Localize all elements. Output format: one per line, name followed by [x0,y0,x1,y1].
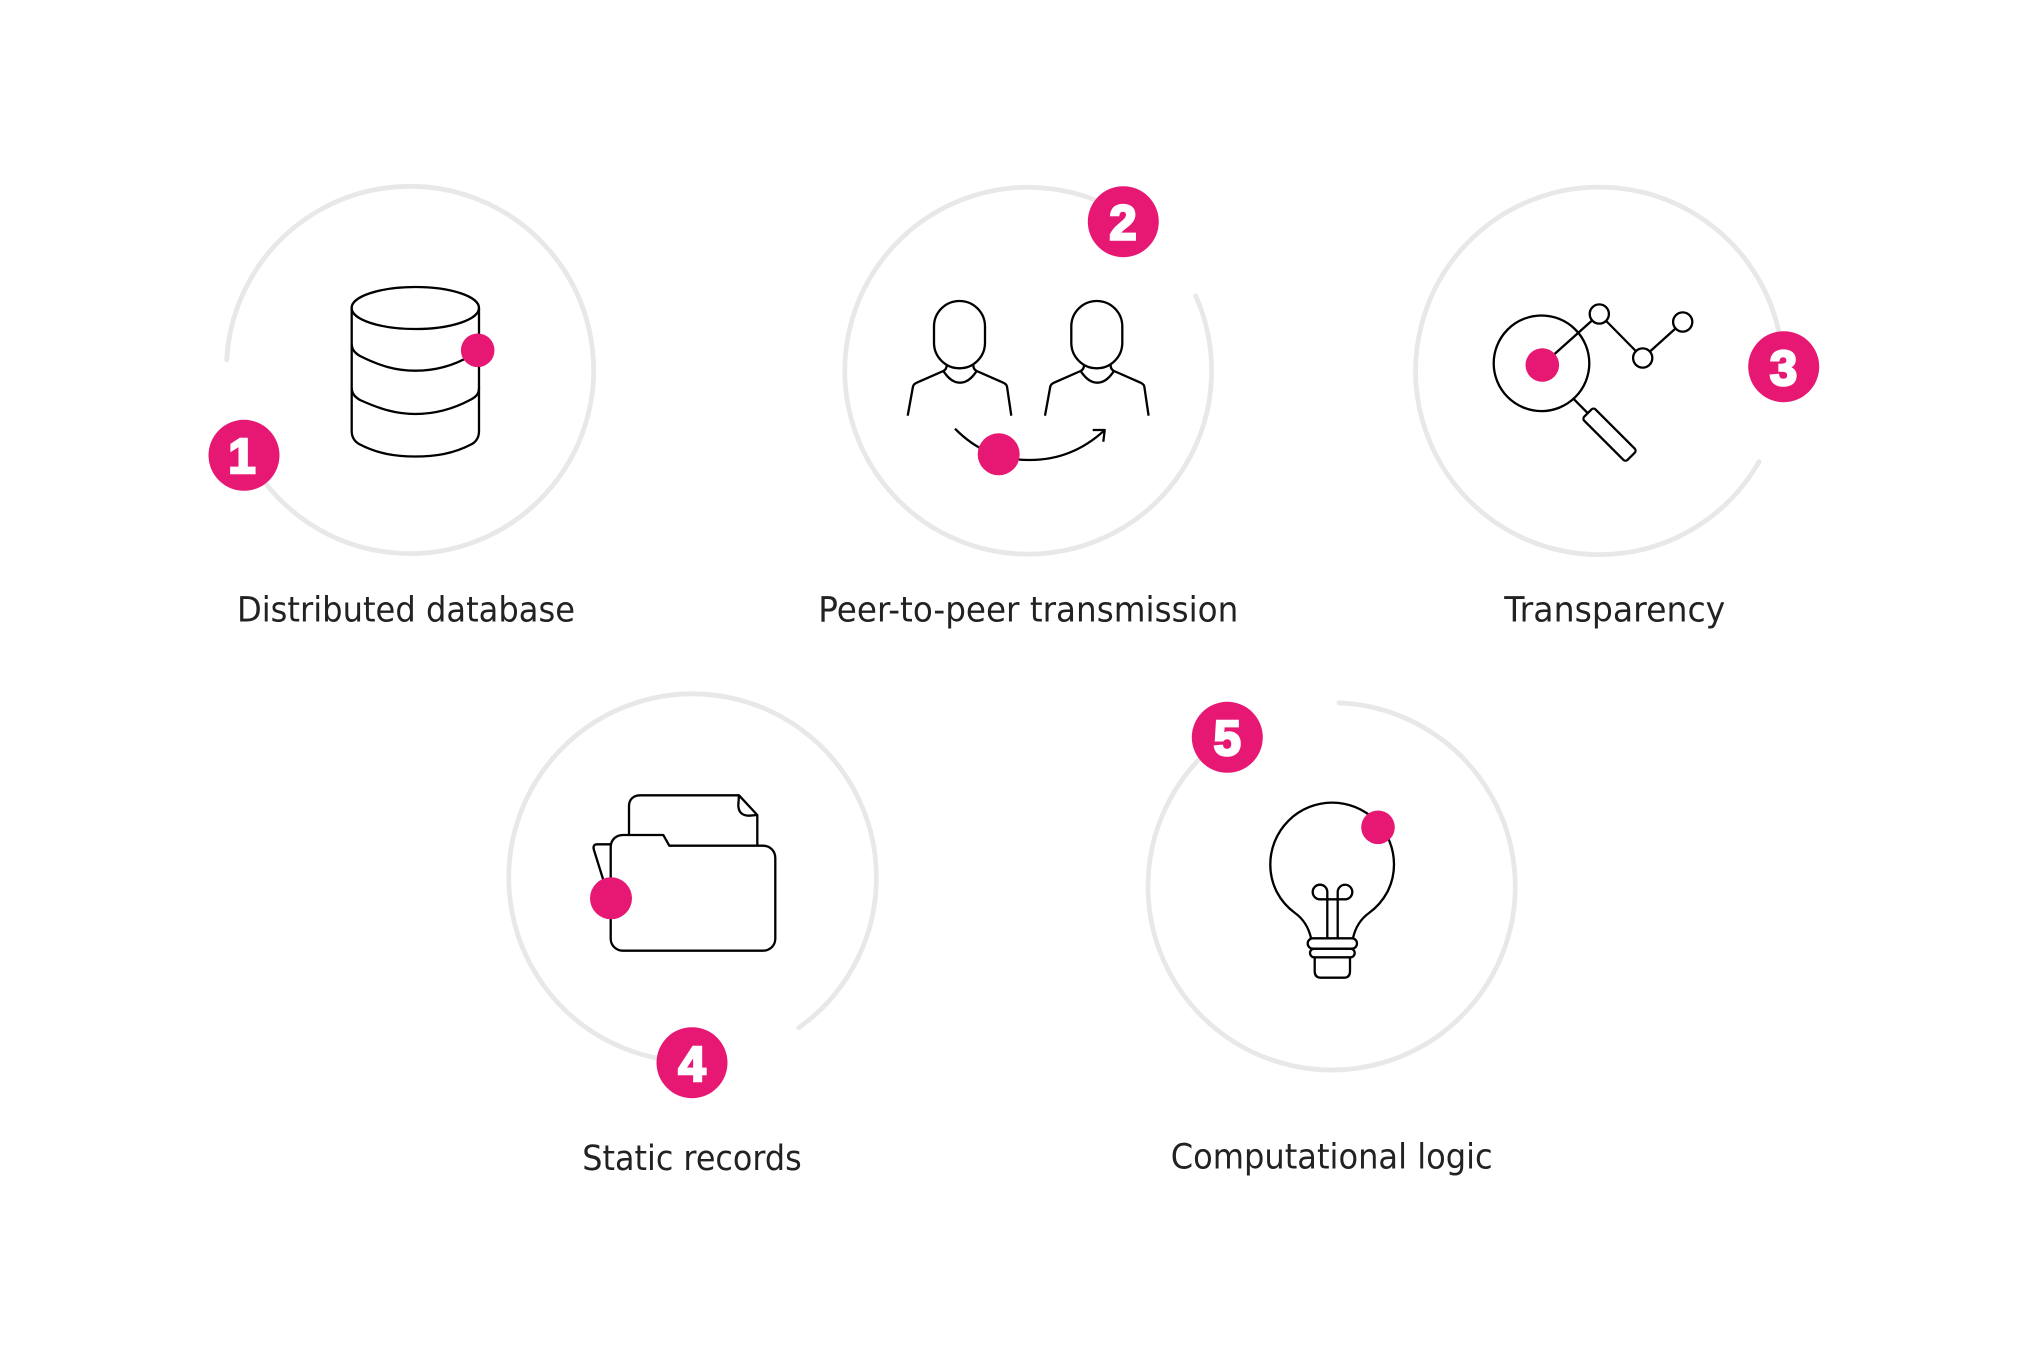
pink marker dot 4 [590,877,632,919]
progress ring 2 [845,187,1212,554]
number badge 5: 5 [1214,712,1241,766]
number badge 5 [1192,702,1263,773]
icon: person right [1045,301,1149,416]
panel: computational logic [1148,702,1515,1177]
panel: transparency [1416,187,1819,631]
label: Distributed database: Distributed database [237,591,575,631]
icon: person left [908,301,1011,416]
number badge 1 [208,420,280,491]
pink marker dot 1 [461,334,495,367]
icon: database cylinder [352,287,479,456]
pink marker dot 5 [1361,810,1395,844]
number badge 2 [1088,186,1159,257]
icon: folder with papers [594,795,775,951]
label: Computational logic: Computational logic [1171,1137,1493,1177]
progress ring 5 [1148,703,1515,1070]
icon: light bulb [1270,803,1394,978]
panel: static records [509,694,876,1179]
arrow: transmission [955,429,1105,460]
progress ring 4 [509,694,876,1062]
progress ring 1 [227,186,594,554]
number badge 1: 1 [228,430,256,484]
panel: distributed database [208,186,594,631]
number badge 3 [1748,331,1819,402]
label: Peer-to-peer transmission: Peer-to-peer transmission [818,591,1238,631]
pink marker dot 3 [1526,348,1559,382]
number badge 4 [656,1027,728,1098]
icon: magnifier with line chart [1494,304,1692,462]
panel: peer-to-peer transmission [818,186,1238,631]
number badge 2: 2 [1109,196,1137,250]
progress ring 3 [1416,187,1783,555]
label: Transparency: Transparency [1503,591,1725,631]
number badge 4: 4 [678,1038,706,1092]
label: Static records: Static records [582,1139,802,1179]
pink marker dot 2 [978,433,1020,475]
number badge 3: 3 [1770,342,1797,396]
